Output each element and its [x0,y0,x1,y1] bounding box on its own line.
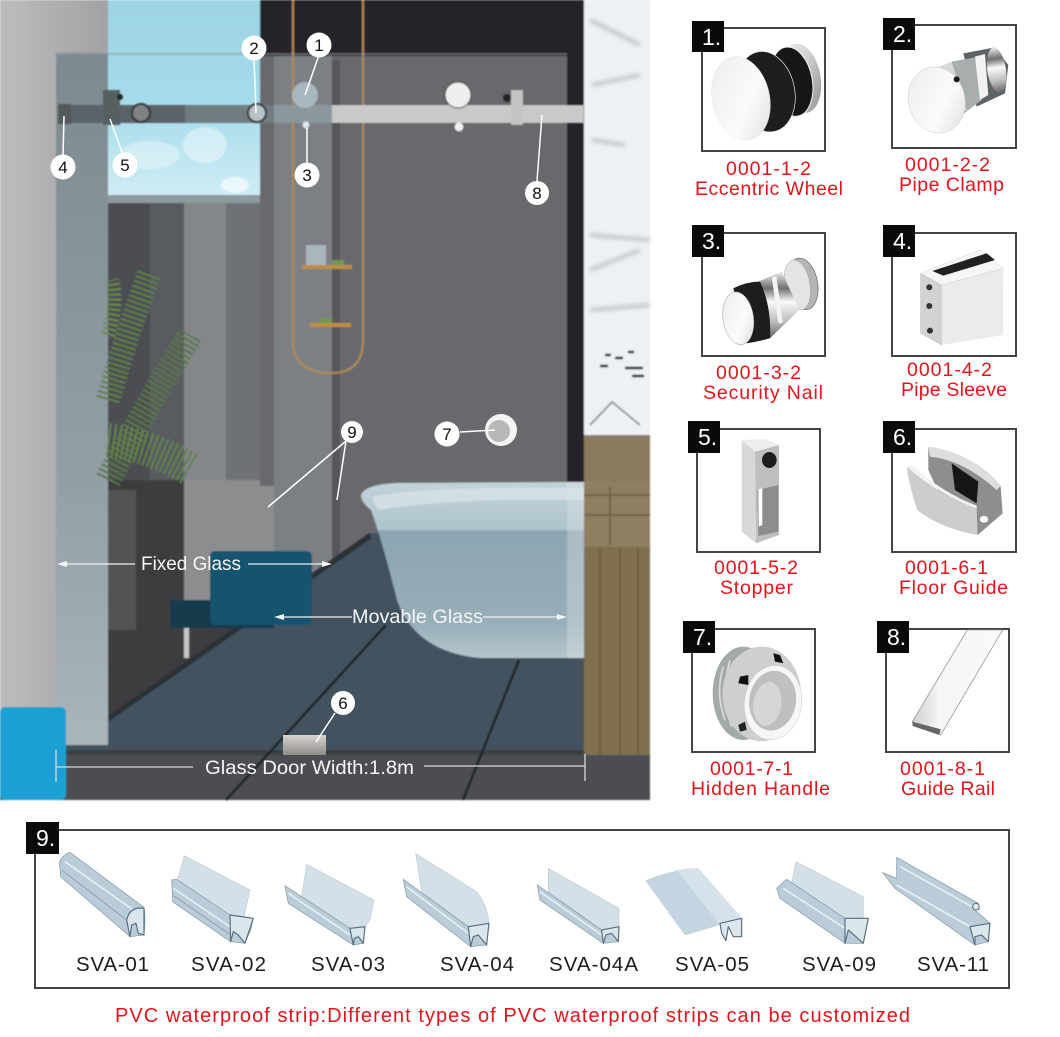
label: 0001-4-2 [907,359,992,381]
label [900,758,995,800]
dimension: movable glass: Movable Glass [352,606,483,628]
strip SVA-01: SVA-01 [76,953,149,976]
label: Hidden Handle [691,778,830,800]
label: 0001-3-2 [716,362,801,384]
badge 9. [26,822,59,854]
label: Eccentric Wheel [695,178,843,200]
strip SVA-03: SVA-03 [311,953,385,976]
label [899,154,1004,196]
sliding rail with hardware [56,53,584,132]
strip SVA-05 [646,868,749,976]
dimension: movable glass [274,606,567,628]
badge 8: 8 [532,184,542,203]
strip SVA-01 [59,852,149,976]
badge 5: 5 [120,156,130,175]
product 1: eccentric wheel [692,21,843,200]
badge 5 [112,152,138,178]
badge 4. [883,225,915,257]
label: Guide Rail [901,778,995,800]
badge 4.: 4. [893,228,912,254]
product image 1 [704,40,826,146]
scene background [0,0,650,800]
badge 1.: 1. [702,24,721,50]
product image 8 [912,630,1003,735]
panel: PVC strips [26,822,1009,988]
badge 7 [434,422,460,446]
label: Security Nail [703,382,823,404]
badge 3.: 3. [702,228,721,254]
badge 6 [331,691,355,715]
dimension: door width [56,750,585,782]
badge 9.: 9. [36,825,55,851]
badge 2 [242,36,266,60]
label: Floor Guide [899,577,1008,599]
product image 3 [719,256,822,347]
product 2: pipe clamp [883,18,1016,196]
label [901,359,1007,401]
product 7: hidden handle [683,621,830,800]
badge 6: 6 [338,694,348,713]
strip SVA-04A: SVA-04A [549,953,638,976]
label [691,758,830,800]
badge 2: 2 [249,39,259,58]
product 3: security nail [692,225,825,404]
label: 0001-7-1 [710,758,793,780]
badge 7: 7 [442,425,452,444]
label: 0001-5-2 [714,557,798,579]
floor guide on door [283,735,326,755]
strip SVA-11 [883,857,990,976]
badge 1. [692,21,724,52]
label: Pipe Sleeve [901,379,1007,401]
badge 1: 1 [314,36,324,55]
strip SVA-05: SVA-05 [675,953,749,976]
product image 7 [713,647,807,744]
badge 4 [50,154,76,180]
strip SVA-09 [777,862,876,976]
badge 4: 4 [58,158,68,177]
strip SVA-09: SVA-09 [802,953,876,976]
product 5: stopper [688,421,820,599]
label [714,557,798,599]
badge 7. [683,621,715,653]
label: Pipe Clamp [899,174,1004,196]
badge 9 [341,421,363,443]
product image 4 [921,250,1003,345]
label: 0001-6-1 [905,557,988,579]
product image 5 [742,439,779,543]
product image 2 [901,46,1009,140]
strip SVA-02 [172,856,266,976]
label: Stopper [720,577,794,599]
badge 8. [877,621,909,653]
badge 5. [688,421,720,453]
product 4: pipe sleeve [883,225,1016,401]
badge 7.: 7. [693,624,712,650]
strip SVA-04: SVA-04 [440,953,514,976]
callout leader lines [63,55,542,742]
product 8: guide rail [877,621,1009,800]
label [695,158,843,200]
badge 3. [692,225,724,257]
badge 3 [294,162,320,188]
strip SVA-04 [403,853,514,976]
badge 9: 9 [347,423,357,442]
panel: bathroom scene [0,0,650,800]
product image 6 [907,447,1003,535]
badge 5.: 5. [698,424,717,450]
strip SVA-04A [537,868,638,976]
strip SVA-03 [285,864,385,976]
label: 0001-1-2 [726,158,811,180]
label [703,362,823,404]
strip SVA-11: SVA-11 [917,953,989,976]
product 6: floor guide [883,421,1016,599]
badge 8.: 8. [887,624,906,650]
label: 0001-2-2 [905,154,990,176]
dimension: fixed glass [57,553,332,575]
badge 8 [525,181,549,205]
dimension: fixed glass: Fixed Glass [141,553,241,575]
footer caption: PVC waterproof strip:Different types of PVC waterproof strips can be customized [115,1005,910,1027]
label [899,557,1008,599]
badge 2. [883,18,915,50]
badge 6.: 6. [893,424,912,450]
badge 1 [306,32,332,58]
badge 6. [883,421,915,453]
label: 0001-8-1 [900,758,985,780]
strip SVA-02: SVA-02 [191,953,266,976]
door handle [485,414,517,446]
dimension: door width: Glass Door Width:1.8m [205,757,414,779]
badge 2.: 2. [893,21,912,47]
badge 3: 3 [302,166,312,185]
